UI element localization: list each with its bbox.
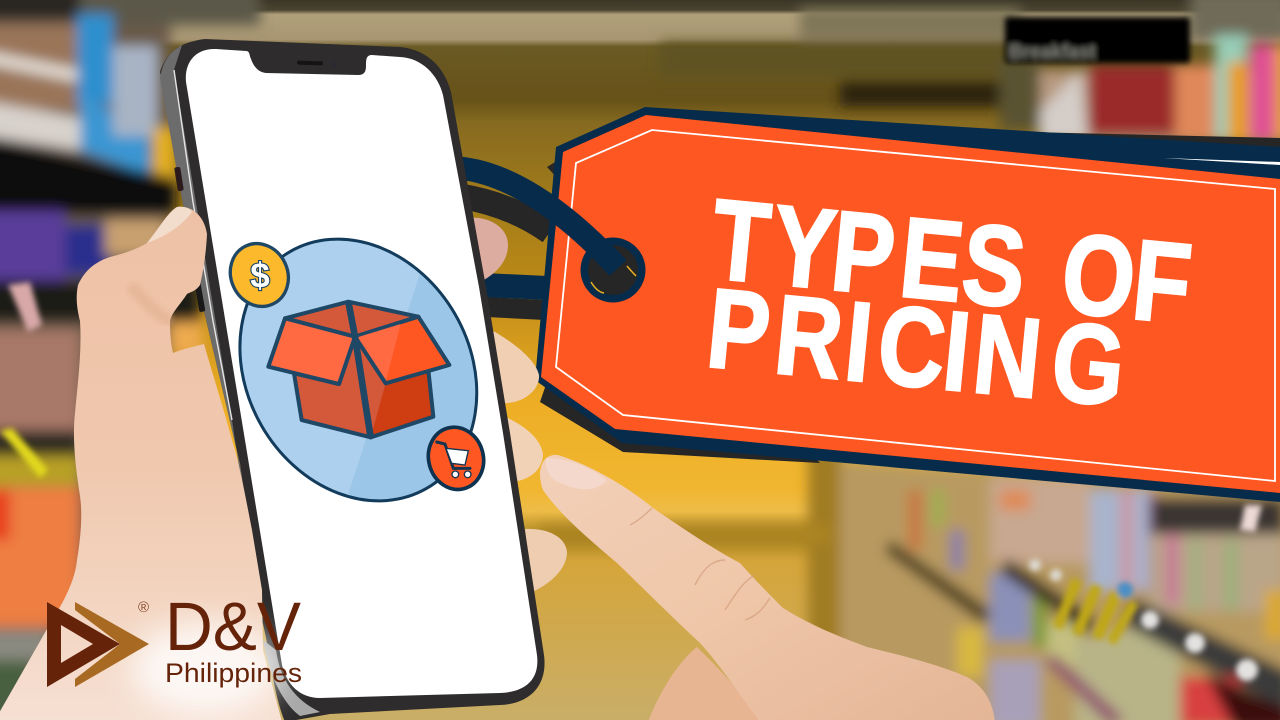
phone screen (186, 49, 537, 698)
open box (268, 302, 449, 437)
light glow on hand (130, 622, 280, 714)
smartphone (160, 39, 545, 720)
icon: dollar coin: $ (250, 256, 270, 295)
finger knuckle creases (630, 508, 770, 620)
logo wordmark (138, 588, 302, 688)
logo wordmark: ® (138, 599, 149, 616)
title text (702, 176, 1196, 430)
phone speaker (297, 61, 323, 65)
right top shelves (1040, 70, 1280, 142)
price tag (535, 107, 1280, 502)
logo wordmark: D&V (165, 588, 301, 665)
fingers behind the phone (465, 218, 567, 592)
tag eyelet hole (580, 238, 646, 302)
icon: shopping cart (421, 421, 491, 496)
lower frame (808, 450, 842, 720)
right lower shelves (840, 460, 1280, 720)
phone metal side (160, 45, 262, 620)
holding hand and thumb (0, 207, 282, 720)
logo wordmark: Philippines (165, 658, 302, 688)
phone camera (330, 62, 338, 68)
phone body (160, 39, 545, 720)
pointing finger (540, 455, 995, 720)
tag inner white outline (556, 130, 1275, 481)
tag string over the tag (458, 168, 618, 268)
ceiling and far aisle (800, 8, 1020, 38)
blurred supermarket aisle background: Breakfast (1009, 42, 1096, 63)
left shelves (0, 0, 170, 720)
thumb nail (147, 207, 192, 243)
second finger of pointing hand (648, 647, 760, 720)
product illustration (228, 238, 486, 502)
finger nail (546, 458, 607, 489)
icon: dollar coin (220, 234, 299, 316)
title text: TYPES OF (706, 176, 1196, 349)
brand logo (47, 588, 302, 688)
title text: PRICING (702, 264, 1130, 430)
logo mark (47, 602, 149, 687)
thumb shading (130, 285, 172, 322)
tag strings behind the phone (460, 196, 550, 310)
blue oval (238, 238, 478, 502)
